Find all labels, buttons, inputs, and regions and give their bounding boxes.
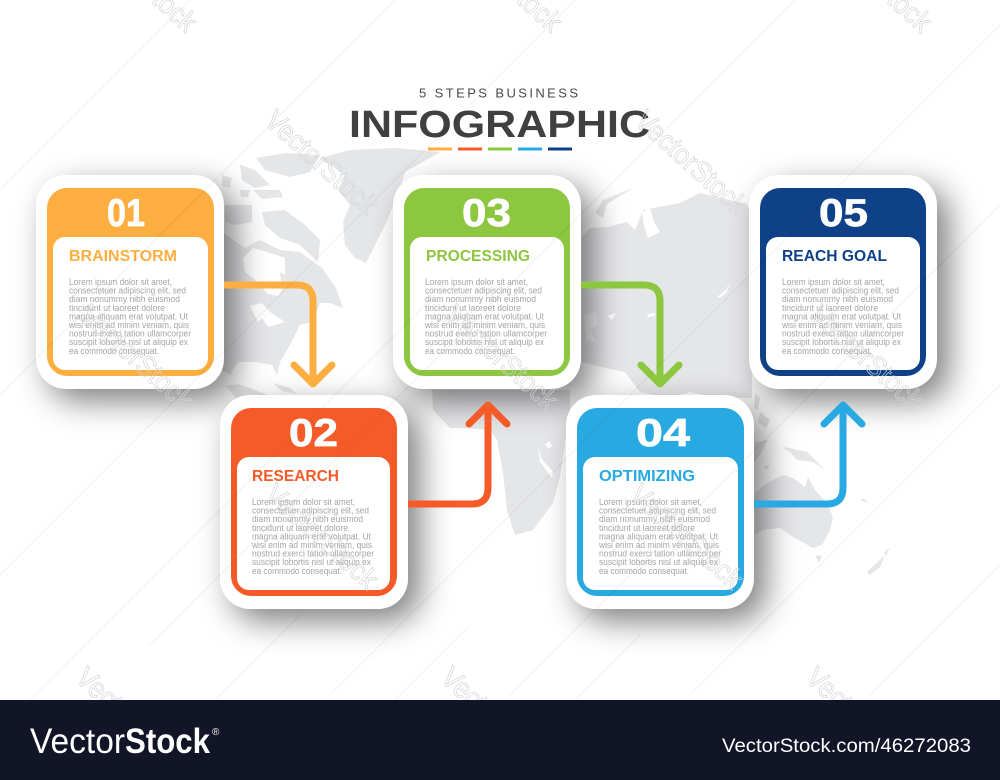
body text: suscipit lobortis nisl ut aliquip ex xyxy=(782,337,902,347)
map: north america xyxy=(215,232,343,375)
body text: wisi enim ad minim veniam, quis xyxy=(251,540,373,550)
body text: nostrud exerci tation ullamcorper xyxy=(599,549,721,559)
body text: magna aliquam erat volutpat. Ut xyxy=(425,311,544,321)
body text: diam nonummy nibh euismod xyxy=(425,294,536,304)
body text: magna aliquam erat volutpat. Ut xyxy=(599,531,718,541)
arrow: step 4 to step 5 xyxy=(754,405,862,504)
body text: wisi enim ad minim veniam, quis xyxy=(781,320,903,330)
body text: nostrud exerci tation ullamcorper xyxy=(69,329,191,339)
body text: tincidunt ut laoreet dolore xyxy=(599,523,695,533)
number 03: 03 xyxy=(462,192,511,235)
arrow: step 1 to step 2 xyxy=(224,285,332,384)
body text: tincidunt ut laoreet dolore xyxy=(252,523,348,533)
watermark stamps: VectorStock xyxy=(258,104,384,222)
footer url: VectorStock.com/46272083 xyxy=(722,736,971,757)
footer logo: Vector xyxy=(30,722,125,761)
body text: ea commodo consequat. xyxy=(782,346,872,356)
map: indonesia and new guinea xyxy=(754,393,825,470)
map: eurasia xyxy=(582,193,752,398)
body text xyxy=(251,497,374,576)
map: greenland xyxy=(320,148,440,263)
watermark stamps: VectorStock xyxy=(258,478,384,596)
title subtitle: 5 STEPS BUSINESS xyxy=(419,86,578,100)
body text: ea commodo consequat. xyxy=(425,346,515,356)
card: step 01 brainstorm xyxy=(36,175,224,389)
footer registered mark: ® xyxy=(212,727,220,738)
body text xyxy=(68,277,191,356)
number 04: 04 xyxy=(636,412,690,455)
heading brainstorm: BRAINSTORM xyxy=(69,248,177,265)
body text xyxy=(781,277,904,356)
watermark stamps: VectorStock xyxy=(73,299,199,417)
map: novaya zemlya xyxy=(595,188,633,218)
body text: magna aliquam erat volutpat. Ut xyxy=(782,311,901,321)
body text: ea commodo consequat. xyxy=(599,566,689,576)
body text: suscipit lobortis nisl ut aliquip ex xyxy=(599,557,719,567)
card: step 02 research xyxy=(220,395,408,609)
footer logo: Stock xyxy=(125,722,210,761)
body text: Lorem ipsum dolor sit amet, xyxy=(782,277,885,287)
card: step 04 optimizing xyxy=(566,395,754,609)
body text: diam nonummy nibh euismod xyxy=(252,514,363,524)
body text: wisi enim ad minim veniam, quis xyxy=(424,320,546,330)
world map xyxy=(215,148,890,575)
body text: wisi enim ad minim veniam, quis xyxy=(68,320,190,330)
body text: tincidunt ut laoreet dolore xyxy=(69,303,165,313)
body text xyxy=(424,277,547,356)
body text: suscipit lobortis nisl ut aliquip ex xyxy=(69,337,189,347)
heading processing: PROCESSING xyxy=(426,248,530,265)
body text: tincidunt ut laoreet dolore xyxy=(425,303,521,313)
card: step 03 processing xyxy=(393,175,581,389)
map: arctic islands xyxy=(222,153,320,262)
number 05: 05 xyxy=(819,192,868,235)
map: tasmania and new zealand xyxy=(815,498,890,575)
arrow: step 3 to step 4 xyxy=(581,285,679,384)
watermark stamps: VectorStock xyxy=(803,299,929,417)
body text: ea commodo consequat. xyxy=(69,346,159,356)
body text: magna aliquam erat volutpat. Ut xyxy=(252,531,371,541)
map: lakes and seas xyxy=(243,208,730,478)
body text: Lorem ipsum dolor sit amet, xyxy=(252,497,355,507)
body text: Lorem ipsum dolor sit amet, xyxy=(69,277,172,287)
heading optimizing: OPTIMIZING xyxy=(599,468,695,485)
arrow: step 2 to step 3 xyxy=(408,405,507,504)
body text: consectetuer adipiscing elit, sed xyxy=(425,286,542,296)
watermark stamps: VectorStock xyxy=(623,478,749,596)
heading research: RESEARCH xyxy=(252,468,339,485)
body text: wisi enim ad minim veniam, quis xyxy=(598,540,720,550)
map: inland seas light xyxy=(584,312,597,342)
body text: nostrud exerci tation ullamcorper xyxy=(782,329,904,339)
watermark stamps: VectorStock xyxy=(438,299,564,417)
map: africa xyxy=(432,390,570,535)
body text: consectetuer adipiscing elit, sed xyxy=(782,286,899,296)
body text: suscipit lobortis nisl ut aliquip ex xyxy=(425,337,545,347)
number 01: 01 xyxy=(107,192,145,235)
footer bar xyxy=(0,700,1000,780)
body text: diam nonummy nibh euismod xyxy=(782,294,893,304)
card shadows xyxy=(48,187,949,621)
map: australia xyxy=(755,475,833,548)
card: step 05 reach goal xyxy=(749,175,937,389)
body text: consectetuer adipiscing elit, sed xyxy=(252,506,369,516)
map: central america and cuba xyxy=(226,383,297,398)
body text: tincidunt ut laoreet dolore xyxy=(782,303,878,313)
body text: nostrud exerci tation ullamcorper xyxy=(252,549,374,559)
body text: diam nonummy nibh euismod xyxy=(599,514,710,524)
body text: consectetuer adipiscing elit, sed xyxy=(69,286,186,296)
body text: consectetuer adipiscing elit, sed xyxy=(599,506,716,516)
title colour dashes xyxy=(428,148,572,150)
body text: magna aliquam erat volutpat. Ut xyxy=(69,311,188,321)
body text: Lorem ipsum dolor sit amet, xyxy=(425,277,528,287)
watermark stamps: VectorStock xyxy=(628,104,754,222)
body text: Lorem ipsum dolor sit amet, xyxy=(599,497,702,507)
main title: INFOGRAPHIC xyxy=(349,104,650,146)
number 02: 02 xyxy=(289,412,338,455)
body text: diam nonummy nibh euismod xyxy=(69,294,180,304)
heading reach goal: REACH GOAL xyxy=(782,248,887,265)
body text xyxy=(598,497,721,576)
body text: ea commodo consequat. xyxy=(252,566,342,576)
body text: suscipit lobortis nisl ut aliquip ex xyxy=(252,557,372,567)
body text: nostrud exerci tation ullamcorper xyxy=(425,329,547,339)
